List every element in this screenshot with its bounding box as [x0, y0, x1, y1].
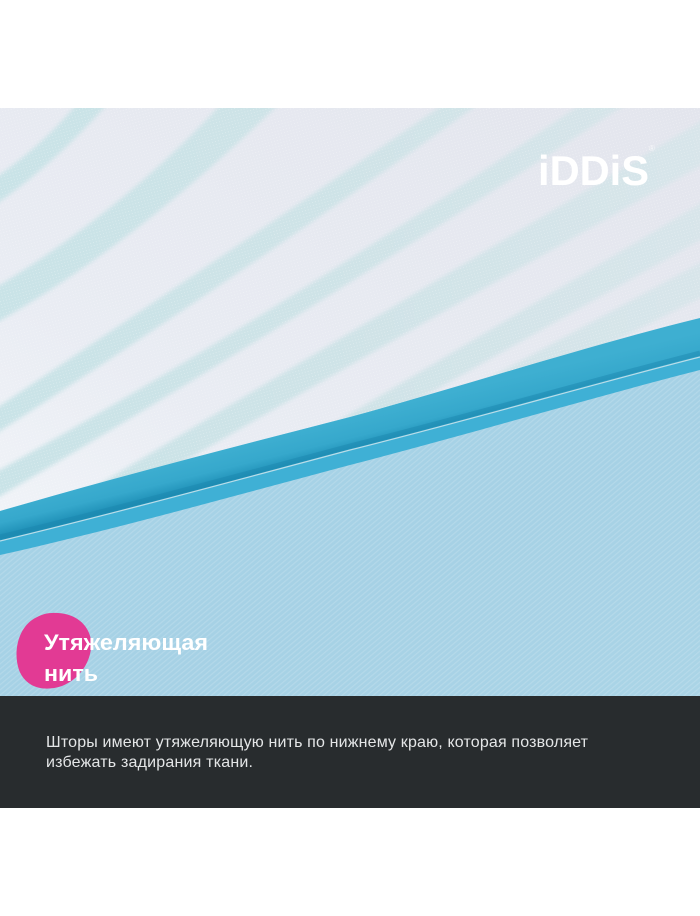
- pale green stripes: [0, 100, 700, 508]
- upper fabric panel: [0, 108, 700, 511]
- dark caption band: [0, 696, 700, 808]
- photo: curtain fabric: [0, 100, 700, 696]
- lower fabric panel: [0, 355, 700, 696]
- infographic canvas: [0, 108, 700, 808]
- blue piping along the hem: [0, 318, 700, 555]
- heading: нить: [44, 661, 98, 686]
- heading: [44, 630, 208, 686]
- caption text: [46, 734, 589, 771]
- logo: IDDIS: iDDiS: [538, 147, 649, 194]
- pink blob accent: [17, 613, 91, 689]
- caption text: избежать задирания ткани.: [46, 754, 253, 771]
- heading: Утяжеляющая: [44, 630, 208, 655]
- caption text: Шторы имеют утяжеляющую нить по нижнему краю, которая позволяет: [46, 734, 589, 751]
- logo: IDDIS: ®: [649, 144, 655, 153]
